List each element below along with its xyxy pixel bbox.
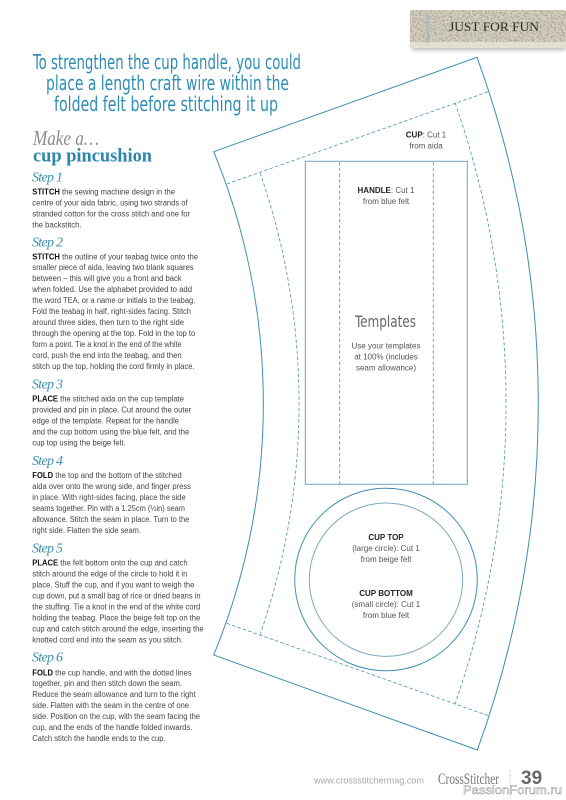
step 3: edge of the template. Repeat for the handle bbox=[32, 416, 180, 425]
step 2: STITCH the outline of your teabag twice onto the bbox=[32, 252, 199, 261]
step 6: Step 6 bbox=[32, 650, 63, 666]
step 2 bbox=[31, 236, 199, 371]
handwritten tip bbox=[32, 50, 301, 116]
step 6: together, pin and then stitch down the seam. bbox=[32, 679, 182, 688]
step 2: Step 2 bbox=[32, 236, 63, 250]
step 2: around three sides, then turn to the right side bbox=[32, 318, 185, 327]
step 1: Step 1 bbox=[32, 170, 63, 186]
footer bbox=[313, 768, 562, 800]
templates note bbox=[352, 312, 420, 372]
cup template outline bbox=[214, 57, 538, 750]
step 4: in place. With right-sides facing, place the side bbox=[32, 493, 186, 502]
templates note: Use your templates bbox=[352, 342, 420, 350]
step 2: when folded. Use the alphabet provided to add bbox=[31, 285, 192, 294]
handle template: from blue felt bbox=[363, 197, 410, 206]
step 5: the stuffing. Tie a knot in the end of the white cord bbox=[32, 602, 200, 612]
step 3 bbox=[32, 378, 192, 447]
cup label: CUP: Cut 1 bbox=[406, 130, 447, 140]
section tab: just for fun: JUST FOR FUN bbox=[449, 20, 539, 34]
title bbox=[32, 126, 152, 166]
step 4: right side. Flatten the side seam. bbox=[32, 526, 141, 535]
step 5: knotted cord end into the seam as you stitch. bbox=[32, 635, 183, 644]
step 6 bbox=[32, 650, 201, 743]
step 6: side. Position on the cup, with the seam facing the bbox=[32, 712, 201, 721]
step 2: the word TEA, or a name or initials to the teabag. bbox=[32, 296, 195, 305]
step 2: form a point. Tie a knot in the end of the white bbox=[32, 340, 182, 349]
templates note: seam allowance) bbox=[356, 364, 416, 372]
step 2: through the opening at the top. Fold in the top to bbox=[32, 329, 196, 338]
step 2: stitch up the top, holding the cord firmly in place. bbox=[32, 362, 195, 371]
step 4: allowance. Stitch the seam in place. Turn to the bbox=[32, 515, 190, 524]
footer: 39 bbox=[521, 768, 542, 789]
step 2: cord, push the end into the teabag, and then bbox=[32, 351, 182, 360]
step 3: Step 3 bbox=[32, 378, 63, 392]
cup top and bottom circles: CUP BOTTOM bbox=[359, 589, 413, 598]
cup top and bottom circles: (large circle): Cut 1 bbox=[352, 544, 420, 553]
step 2: between – this will give you a front and back bbox=[32, 274, 183, 283]
step 5: cup down, put a small bag of rice or dried beans in bbox=[32, 592, 201, 600]
step 4: aida over onto the wrong side, and finger press bbox=[32, 482, 191, 491]
templates note: at 100% (includes bbox=[354, 352, 418, 362]
step 4 bbox=[32, 454, 191, 535]
step 3: provided and pin in place. Cut around the outer bbox=[32, 405, 192, 414]
cup top and bottom circles: (small circle): Cut 1 bbox=[352, 600, 421, 609]
footer: PassionForum.ru bbox=[463, 783, 562, 797]
step 2: Fold the teabag in half, right-sides facing. Stitch bbox=[32, 307, 191, 316]
step 2: smaller piece of aida, leaving two blank squares bbox=[32, 263, 194, 272]
step 5: Step 5 bbox=[32, 542, 63, 556]
step 5: cup and catch stitch around the edge, inserting the bbox=[32, 624, 204, 633]
handle template bbox=[305, 161, 467, 484]
step 5: holding the teabag. Place the beige felt top on the bbox=[32, 613, 201, 622]
cup label second line: from aida bbox=[409, 142, 443, 150]
handwritten tip: folded felt before stitching it up bbox=[54, 92, 278, 116]
step 3: cup top using the beige felt. bbox=[32, 438, 126, 447]
step 6: Catch stitch the handle ends to the cup. bbox=[32, 734, 166, 743]
step 5: stitch around the edge of the circle to hold it in bbox=[32, 570, 187, 579]
step 3: and the cup bottom using the blue felt, and the bbox=[32, 427, 190, 436]
cup top and bottom circles bbox=[295, 488, 477, 671]
step 1: the backstitch. bbox=[32, 220, 82, 229]
title: Make a… bbox=[32, 126, 99, 150]
step 6: cup, and the ends of the handle folded inwards. bbox=[32, 723, 192, 732]
step 5 bbox=[32, 542, 204, 644]
handwritten tip: place a length craft wire within the bbox=[46, 71, 289, 95]
step 4: Step 4 bbox=[32, 454, 63, 469]
footer: CrossStitcher bbox=[438, 771, 499, 788]
cup top and bottom circles: CUP TOP bbox=[368, 533, 404, 542]
footer: www.crossstitchermag.com bbox=[313, 776, 424, 786]
step 4: seams together. Pin with a 1.25cm (½in) seam bbox=[32, 504, 185, 513]
step 5: place. Stuff the cup, and if you want to weigh the bbox=[32, 581, 195, 590]
handwritten tip: To strengthen the cup handle, you could bbox=[32, 50, 301, 74]
step 1 bbox=[32, 170, 190, 229]
step 1: stranded cotton for the cross stitch and one for bbox=[32, 209, 190, 218]
step 6: side. Flatten with the seam in the centre of one bbox=[32, 701, 190, 710]
step 1: STITCH the sewing machine design in the bbox=[32, 187, 176, 196]
step 5: PLACE the felt bottom onto the cup and catch bbox=[32, 559, 188, 568]
step 3: PLACE the stitched aida on the cup template bbox=[32, 394, 185, 404]
step 6: FOLD the cup handle, and with the dotted lines bbox=[32, 668, 192, 677]
step 6: Reduce the seam allowance and turn to the right bbox=[32, 690, 196, 699]
cup top and bottom circles: from blue felt bbox=[363, 611, 410, 620]
step 4: FOLD the top and the bottom of the stitched bbox=[32, 471, 182, 480]
handle template: HANDLE: Cut 1 bbox=[358, 186, 415, 195]
templates note: Templates bbox=[354, 312, 416, 331]
step 1: centre of your aida fabric, using two strands of bbox=[32, 198, 188, 207]
section tab: just for fun bbox=[410, 10, 566, 50]
cup top and bottom circles: from beige felt bbox=[361, 555, 412, 564]
title: cup pincushion bbox=[33, 146, 152, 166]
